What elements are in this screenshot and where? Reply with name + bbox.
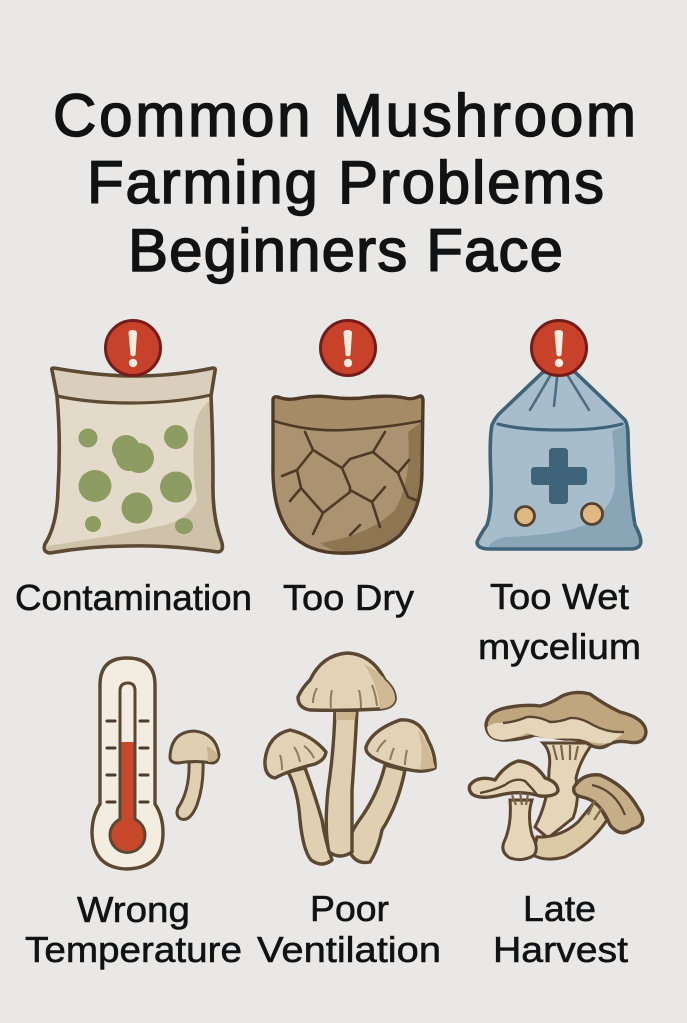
label: too wet mycelium: [478, 576, 641, 667]
label: poor ventilation: Ventilation: [257, 929, 441, 970]
icon: thermometer: [92, 658, 163, 869]
icon: dry cracked substrate: [272, 396, 423, 553]
label: wrong temperature: [25, 889, 242, 970]
label: too wet mycelium: Too Wet: [490, 576, 629, 617]
title: Farming Problems: [87, 149, 604, 216]
icon: ventilation mushroom cluster: [265, 653, 435, 864]
label: wrong temperature: Temperature: [25, 929, 242, 970]
label: late harvest: [493, 888, 628, 970]
icon: contaminated bag: [44, 368, 222, 553]
label: contamination: Contamination: [15, 577, 252, 618]
label: too wet mycelium: mycelium: [478, 626, 641, 667]
label: too dry: Too Dry: [283, 577, 414, 618]
icon: small mushroom: [170, 731, 219, 819]
icon: alert badge 2: [320, 320, 376, 376]
title: [53, 82, 636, 284]
title: Beginners Face: [128, 217, 563, 284]
label: poor ventilation: Poor: [310, 888, 389, 929]
icon: alert badge 1: [106, 320, 160, 376]
icon: alert badge 3: [532, 320, 586, 376]
icon: wet bag: [477, 372, 641, 549]
label: wrong temperature: Wrong: [77, 889, 190, 930]
label: late harvest: Late: [523, 888, 596, 929]
label: late harvest: Harvest: [493, 929, 628, 970]
title: Common Mushroom: [53, 82, 636, 149]
label: poor ventilation: [257, 888, 441, 970]
icon: late harvest mushrooms: [469, 692, 646, 860]
